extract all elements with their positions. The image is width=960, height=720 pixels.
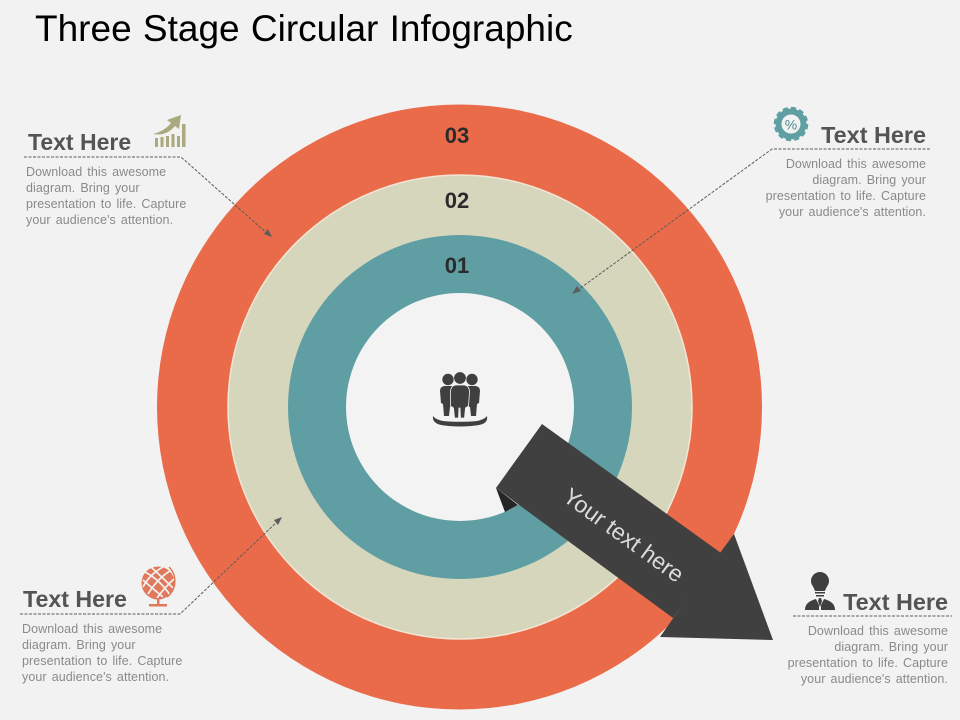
body text: your audience's attention. bbox=[801, 672, 948, 686]
icon: lightbulb businessman bbox=[805, 572, 835, 610]
body text: presentation to life. Capture bbox=[22, 654, 182, 668]
body text bbox=[26, 165, 186, 227]
body text: your audience's attention. bbox=[26, 213, 173, 227]
body text: presentation to life. Capture bbox=[788, 656, 948, 670]
connector: top right bbox=[572, 149, 930, 294]
arrow fold bbox=[496, 488, 518, 512]
ring number 03: 03 bbox=[445, 123, 469, 148]
callout: bottom left bbox=[22, 586, 182, 684]
heading: Text Here bbox=[821, 122, 926, 148]
icon: globe bbox=[142, 566, 175, 606]
callout: top right bbox=[766, 122, 926, 219]
body text: Download this awesome bbox=[786, 157, 926, 171]
title: Three Stage Circular Infographic bbox=[35, 8, 573, 49]
icon: growth chart bbox=[153, 115, 186, 147]
body text bbox=[22, 622, 182, 684]
body text: Download this awesome bbox=[808, 624, 948, 638]
body text: diagram. Bring your bbox=[26, 181, 140, 195]
callout: bottom right bbox=[788, 589, 948, 686]
body text: presentation to life. Capture bbox=[26, 197, 186, 211]
body text: diagram. Bring your bbox=[22, 638, 136, 652]
heading: Text Here bbox=[843, 589, 948, 615]
body text bbox=[788, 624, 948, 686]
divider: bottom right bbox=[793, 615, 952, 617]
body text: Download this awesome bbox=[22, 622, 162, 636]
heading: Text Here bbox=[28, 129, 131, 155]
ring number 02: 02 bbox=[445, 188, 469, 213]
arrow banner bbox=[496, 424, 773, 640]
connector: top left bbox=[24, 157, 272, 237]
icon: percent gear: % bbox=[785, 116, 797, 132]
body text: diagram. Bring your bbox=[812, 173, 926, 187]
arrow head bbox=[660, 534, 773, 640]
body text: Download this awesome bbox=[26, 165, 166, 179]
arrow label: Your text here bbox=[558, 483, 689, 587]
center disc bbox=[346, 293, 574, 521]
icon: people group bbox=[433, 372, 487, 426]
body text bbox=[766, 157, 926, 219]
ring 02 bbox=[228, 175, 692, 639]
body text: presentation to life. Capture bbox=[766, 189, 926, 203]
connector: bottom left bbox=[20, 517, 282, 614]
body text: your audience's attention. bbox=[22, 670, 169, 684]
body text: your audience's attention. bbox=[779, 205, 926, 219]
ring 03 bbox=[157, 104, 762, 710]
callout: top left bbox=[26, 129, 186, 227]
icon: percent gear bbox=[776, 108, 806, 140]
body text: diagram. Bring your bbox=[834, 640, 948, 654]
heading: Text Here bbox=[23, 586, 127, 612]
ring number 01: 01 bbox=[445, 253, 469, 278]
arrow body bbox=[496, 424, 721, 618]
ring 01 bbox=[288, 235, 632, 579]
